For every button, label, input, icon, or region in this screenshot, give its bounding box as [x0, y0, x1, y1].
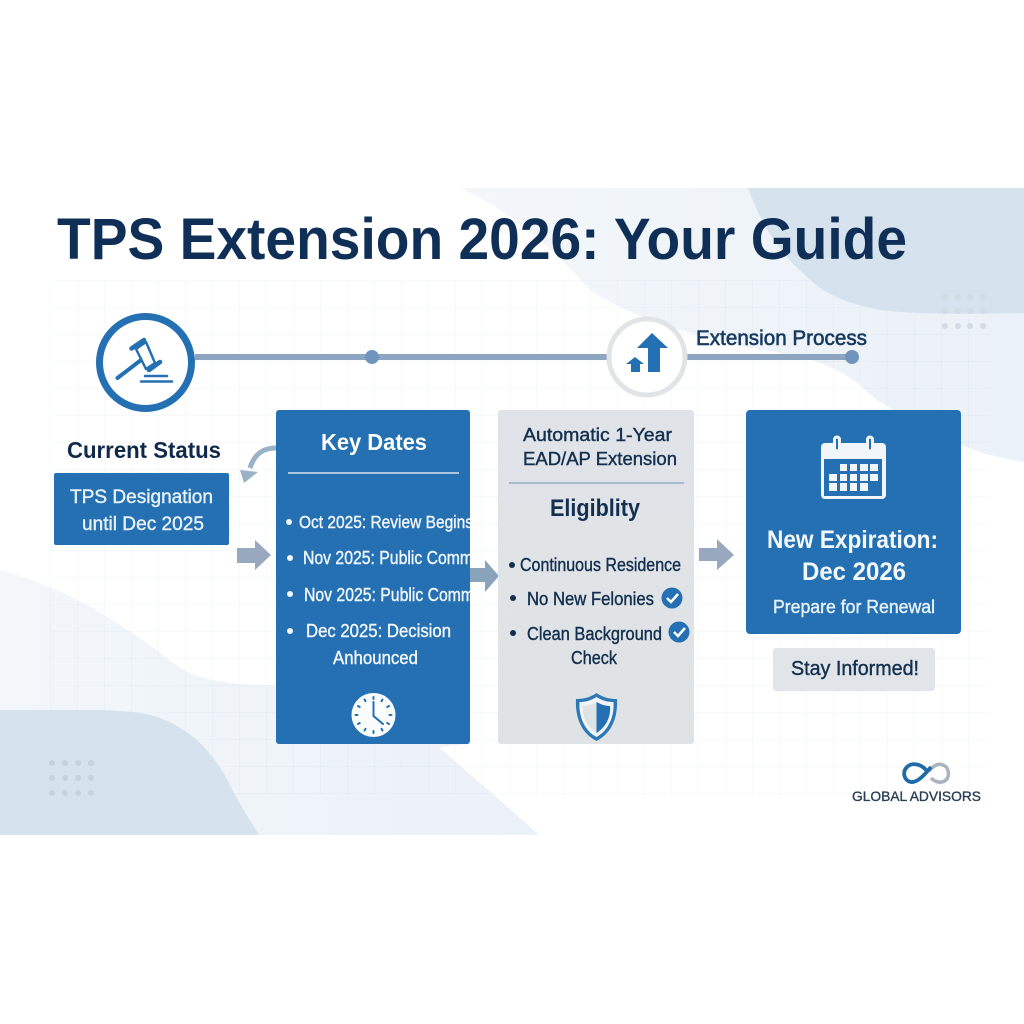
arrow: key dates to eligibility — [470, 560, 499, 592]
callout: stay informed — [773, 648, 935, 691]
eligibility list: No New Felonies — [527, 589, 654, 609]
key dates list: Nov 2025: Public Comment — [303, 548, 495, 568]
panel: TPS designation: until Dec 2025 — [82, 513, 204, 535]
text: prepare for renewal: Prepare for Renewal — [773, 596, 935, 617]
title: TPS Extension 2026: Your Guide — [57, 207, 907, 272]
timeline — [195, 350, 859, 364]
icon: check 1 — [662, 588, 682, 608]
heading: automatic extension — [523, 424, 677, 469]
panel: eligibility — [498, 410, 694, 744]
dot pattern: bottom left — [49, 760, 94, 796]
logo text: GLOBAL ADVISORS — [852, 788, 981, 804]
logo: global advisors — [852, 764, 981, 804]
icon: upward arrows — [609, 319, 685, 395]
label: extension process: Extension Process — [696, 327, 867, 350]
key dates list — [286, 514, 470, 664]
eligibility list: Continuous Residence — [520, 555, 681, 575]
eligibility list: Check — [571, 648, 618, 668]
dot pattern: top right — [942, 294, 986, 329]
icon: calendar — [821, 437, 886, 499]
key dates list: Oct 2025: Review Begins — [299, 512, 473, 532]
timeline node: end — [845, 350, 859, 364]
icon: shield — [576, 693, 617, 741]
eligibility list: Clean Background — [527, 624, 662, 644]
heading: automatic extension: Automatic 1-Year — [523, 424, 672, 445]
text: new expiration: New Expiration: — [767, 526, 938, 554]
panel: new expiration — [746, 410, 961, 634]
text: expiry date: Dec 2026 — [802, 558, 906, 586]
heading: key dates: Key Dates — [321, 429, 427, 455]
icon: check 2 — [668, 622, 690, 642]
icon: gavel — [100, 316, 192, 408]
timeline node: middle — [365, 350, 379, 364]
heading: current status: Current Status — [67, 437, 221, 463]
callout: stay informed: Stay Informed! — [791, 658, 919, 680]
panel: key dates — [276, 410, 470, 744]
arrow: eligibility to expiration — [699, 539, 734, 570]
heading: automatic extension: EAD/AP Extension — [523, 448, 677, 469]
key dates list: Anhounced — [333, 648, 418, 668]
icon: clock — [352, 693, 396, 737]
eligibility list — [509, 555, 681, 668]
key dates list: Dec 2025: Decision — [306, 621, 451, 641]
arrow: status to key dates — [237, 540, 271, 570]
panel: TPS designation — [54, 473, 229, 545]
panel: TPS designation: TPS Designation — [70, 486, 213, 508]
key dates list: Nov 2025: Public Comment — [304, 585, 496, 605]
background shapes — [0, 188, 1024, 835]
heading: eligibility: Eligiblity — [550, 495, 641, 522]
arrow: curved back to status — [240, 448, 276, 483]
